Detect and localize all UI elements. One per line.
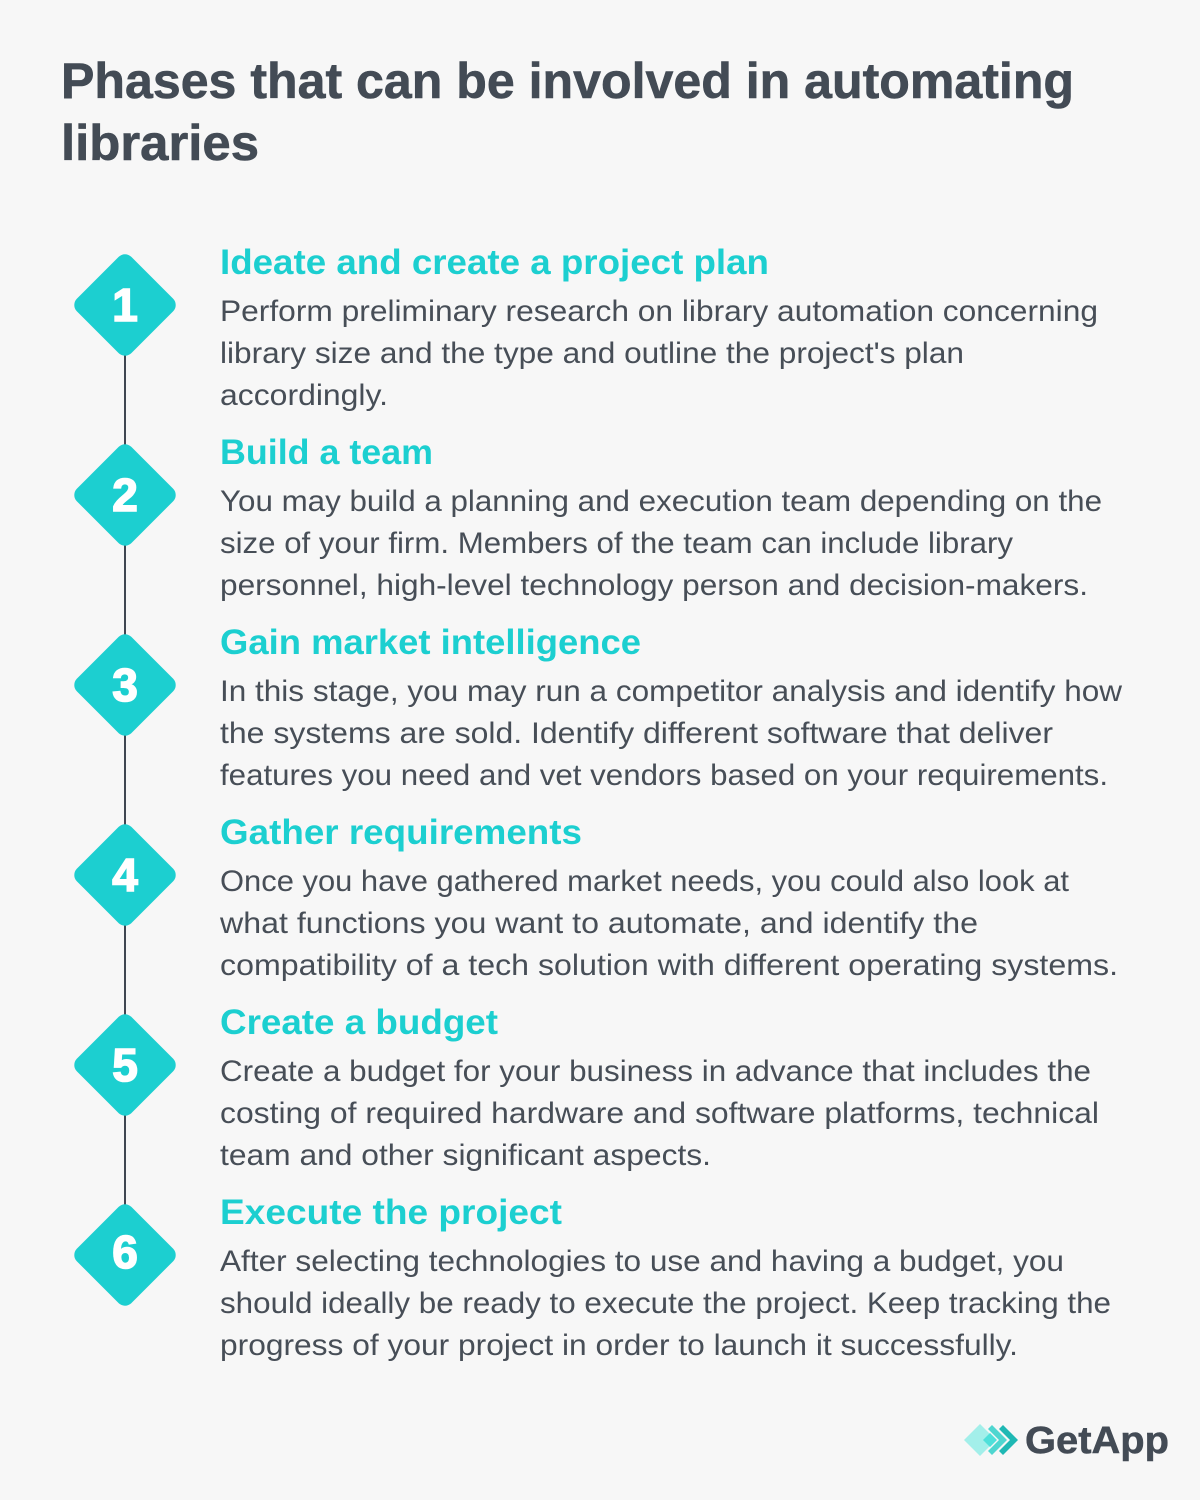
text: step 3 description <box>220 675 1122 792</box>
text: step 3 description: In this stage, you may run a competitor analysis and identify how <box>220 675 1122 708</box>
icon: number 1 diamond <box>71 251 179 359</box>
icon: number 5 diamond <box>71 1011 179 1119</box>
text: step 2 description: You may build a planning and execution team depending on the <box>220 485 1102 518</box>
logo: GetApp <box>964 1420 1169 1462</box>
text: step 4 description: compatibility of a tech solution with different operating systems. <box>220 949 1118 982</box>
step 6 <box>71 1193 1111 1362</box>
text: step 6 description: progress of your project in order to launch it successfully. <box>220 1329 1018 1362</box>
heading: step 6: Execute the project <box>220 1193 562 1232</box>
icon: GetApp chevrons <box>964 1424 1018 1456</box>
icon: number 1 diamond: 1 <box>112 279 138 331</box>
icon: number 6 diamond <box>71 1201 179 1309</box>
icon: number 2 diamond: 2 <box>112 469 138 521</box>
text: step 4 description: Once you have gathered market needs, you could also look at <box>220 865 1070 898</box>
text: step 4 description <box>219 865 1118 982</box>
text: step 5 description <box>220 1055 1099 1172</box>
icon: number 6 diamond: 6 <box>112 1226 138 1278</box>
step 3 <box>71 623 1122 792</box>
title: libraries <box>61 115 259 171</box>
heading: step 1: Ideate and create a project plan <box>220 243 769 282</box>
text: step 2 description <box>220 485 1102 602</box>
text: step 2 description: size of your firm. Members of the team can include library <box>220 527 1013 560</box>
text: step 5 description: team and other significant aspects. <box>220 1139 711 1172</box>
title: Phases that can be involved in automating <box>61 53 1074 109</box>
text: step 5 description: costing of required hardware and software platforms, technical <box>220 1097 1099 1130</box>
heading: step 4: Gather requirements <box>220 813 582 852</box>
icon: number 4 diamond: 4 <box>112 849 138 901</box>
text: step 1 description <box>220 295 1098 412</box>
icon: number 2 diamond <box>71 441 179 549</box>
text: step 4 description: what functions you want to automate, and identify the <box>219 907 978 940</box>
heading: step 3: Gain market intelligence <box>220 623 641 662</box>
text: step 3 description: the systems are sold. Identify different software that deliver <box>220 717 1053 750</box>
text: step 1 description: Perform preliminary research on library automation concerning <box>220 295 1098 328</box>
text: step 1 description: library size and the type and outline the project's plan <box>220 337 964 370</box>
heading: step 2: Build a team <box>220 433 433 472</box>
icon: number 4 diamond <box>71 821 179 929</box>
text: step 1 description: accordingly. <box>220 379 388 412</box>
step 2 <box>71 433 1102 602</box>
icon: number 5 diamond: 5 <box>112 1039 138 1091</box>
step 1 <box>71 243 1098 412</box>
logo wordmark: GetApp <box>1025 1420 1169 1462</box>
heading: step 5: Create a budget <box>220 1003 498 1042</box>
step 5 <box>71 1003 1099 1172</box>
text: step 3 description: features you need and vet vendors based on your requirements. <box>220 759 1108 792</box>
icon: number 3 diamond: 3 <box>112 659 138 711</box>
icon: number 3 diamond <box>71 631 179 739</box>
timeline connector lines <box>124 350 126 1210</box>
text: step 2 description: personnel, high-level technology person and decision-makers. <box>220 569 1088 602</box>
text: step 5 description: Create a budget for your business in advance that includes the <box>220 1055 1091 1088</box>
text: step 6 description: After selecting technologies to use and having a budget, you <box>220 1245 1064 1278</box>
title <box>61 53 1074 171</box>
text: step 6 description: should ideally be ready to execute the project. Keep tracking the <box>220 1287 1111 1320</box>
text: step 6 description <box>220 1245 1111 1362</box>
step 4 <box>71 813 1118 982</box>
